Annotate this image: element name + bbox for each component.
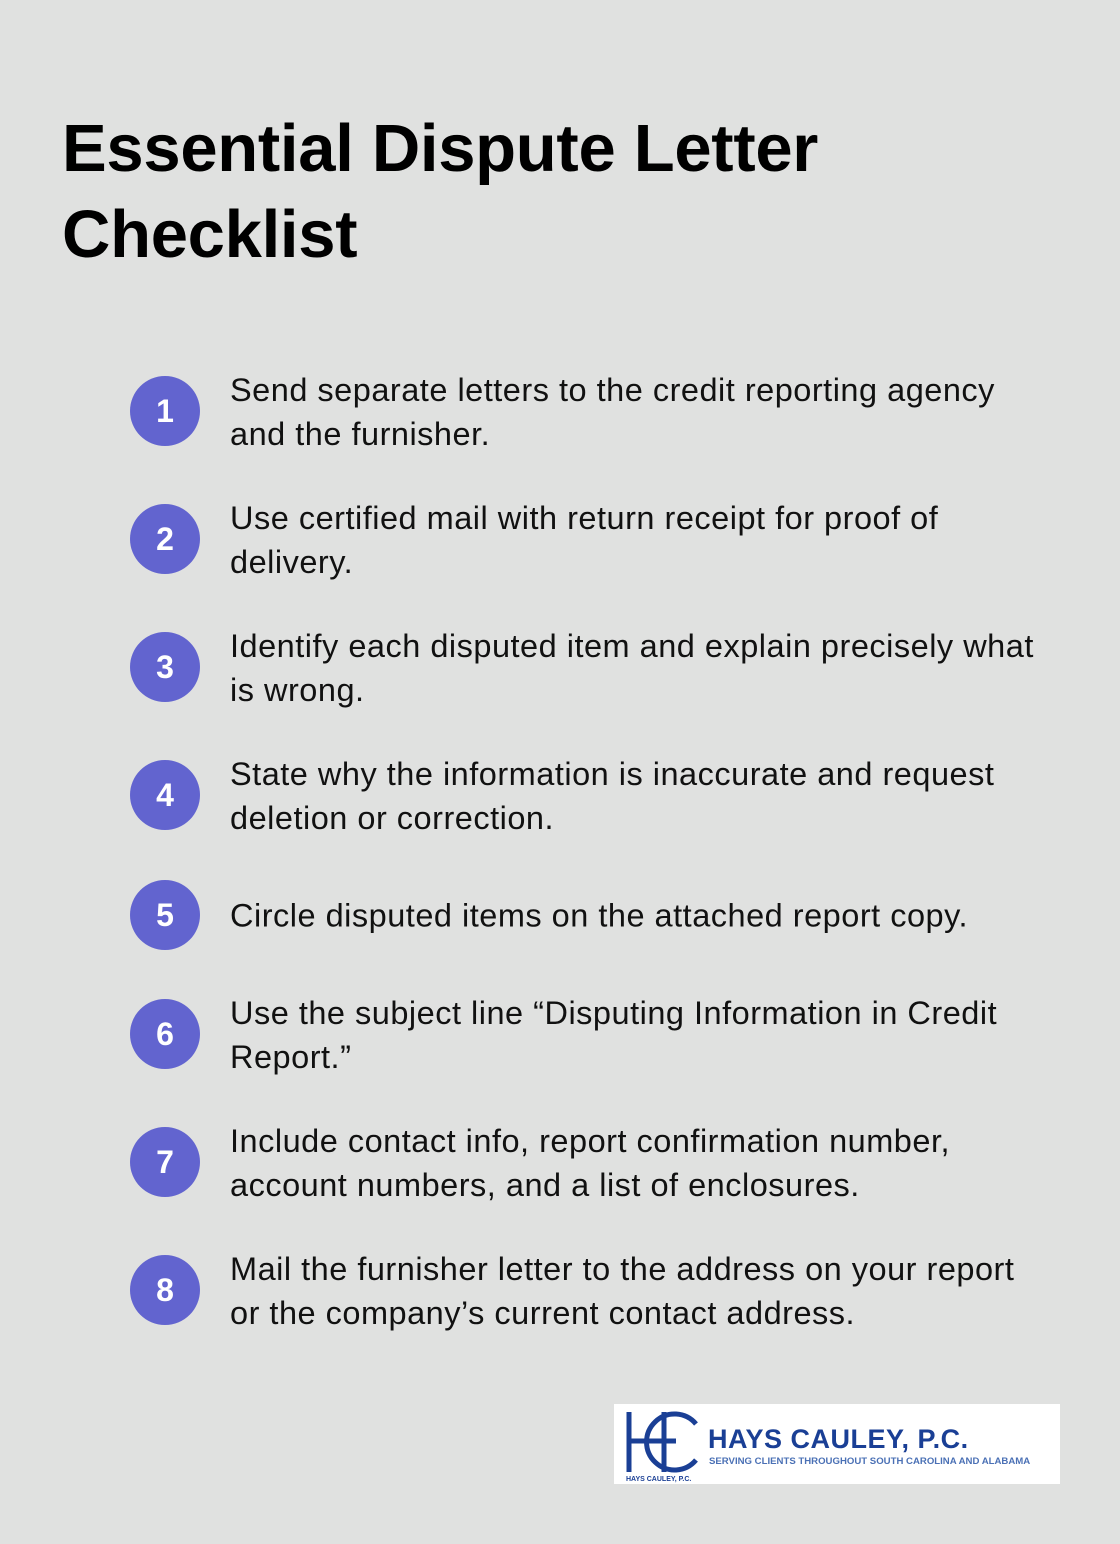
- item 2: 2: [156, 521, 174, 557]
- logo: HAYS CAULEY, P.C.: [708, 1424, 969, 1454]
- item 8: 8: [156, 1272, 174, 1308]
- title: Essential Dispute Letter: [62, 111, 818, 186]
- item 1: 1: [156, 393, 174, 429]
- item 6: Use the subject line “Disputing Information in Credit: [230, 995, 997, 1031]
- logo: HAYS CAULEY, P.C.: [626, 1476, 691, 1483]
- item 7: account numbers, and a list of enclosures.: [230, 1167, 860, 1203]
- item 5: 5: [156, 897, 174, 933]
- item 5: [130, 880, 968, 950]
- item 2: delivery.: [230, 544, 353, 580]
- item 7: Include contact info, report confirmation number,: [230, 1123, 950, 1159]
- item 1: and the furnisher.: [230, 416, 490, 452]
- item 1: [130, 372, 995, 452]
- item 2: Use certified mail with return receipt for proof of: [230, 500, 938, 536]
- item 3: 3: [156, 649, 174, 685]
- item 6: [130, 995, 997, 1075]
- item 8: [130, 1251, 1014, 1331]
- item 2: [130, 500, 938, 580]
- item 4: [130, 756, 994, 836]
- item 5: Circle disputed items on the attached report copy.: [230, 897, 968, 933]
- item 8: or the company’s current contact address.: [230, 1295, 855, 1331]
- logo: SERVING CLIENTS THROUGHOUT SOUTH CAROLINA AND ALABAMA: [709, 1456, 1030, 1467]
- item 4: 4: [156, 777, 174, 813]
- logo: [614, 1404, 1060, 1484]
- item 6: Report.”: [230, 1039, 351, 1075]
- item 4: deletion or correction.: [230, 800, 554, 836]
- item 3: is wrong.: [230, 672, 365, 708]
- item 6: 6: [156, 1016, 174, 1052]
- title: Checklist: [62, 197, 357, 272]
- item 1: Send separate letters to the credit reporting agency: [230, 372, 995, 408]
- item 7: 7: [156, 1144, 174, 1180]
- title: [62, 111, 818, 272]
- icon: HC monogram: [629, 1412, 696, 1472]
- item 8: Mail the furnisher letter to the address on your report: [230, 1251, 1014, 1287]
- item 3: Identify each disputed item and explain precisely what: [230, 628, 1034, 664]
- item 3: [130, 628, 1034, 708]
- item 4: State why the information is inaccurate and request: [230, 756, 994, 792]
- item 7: [130, 1123, 950, 1203]
